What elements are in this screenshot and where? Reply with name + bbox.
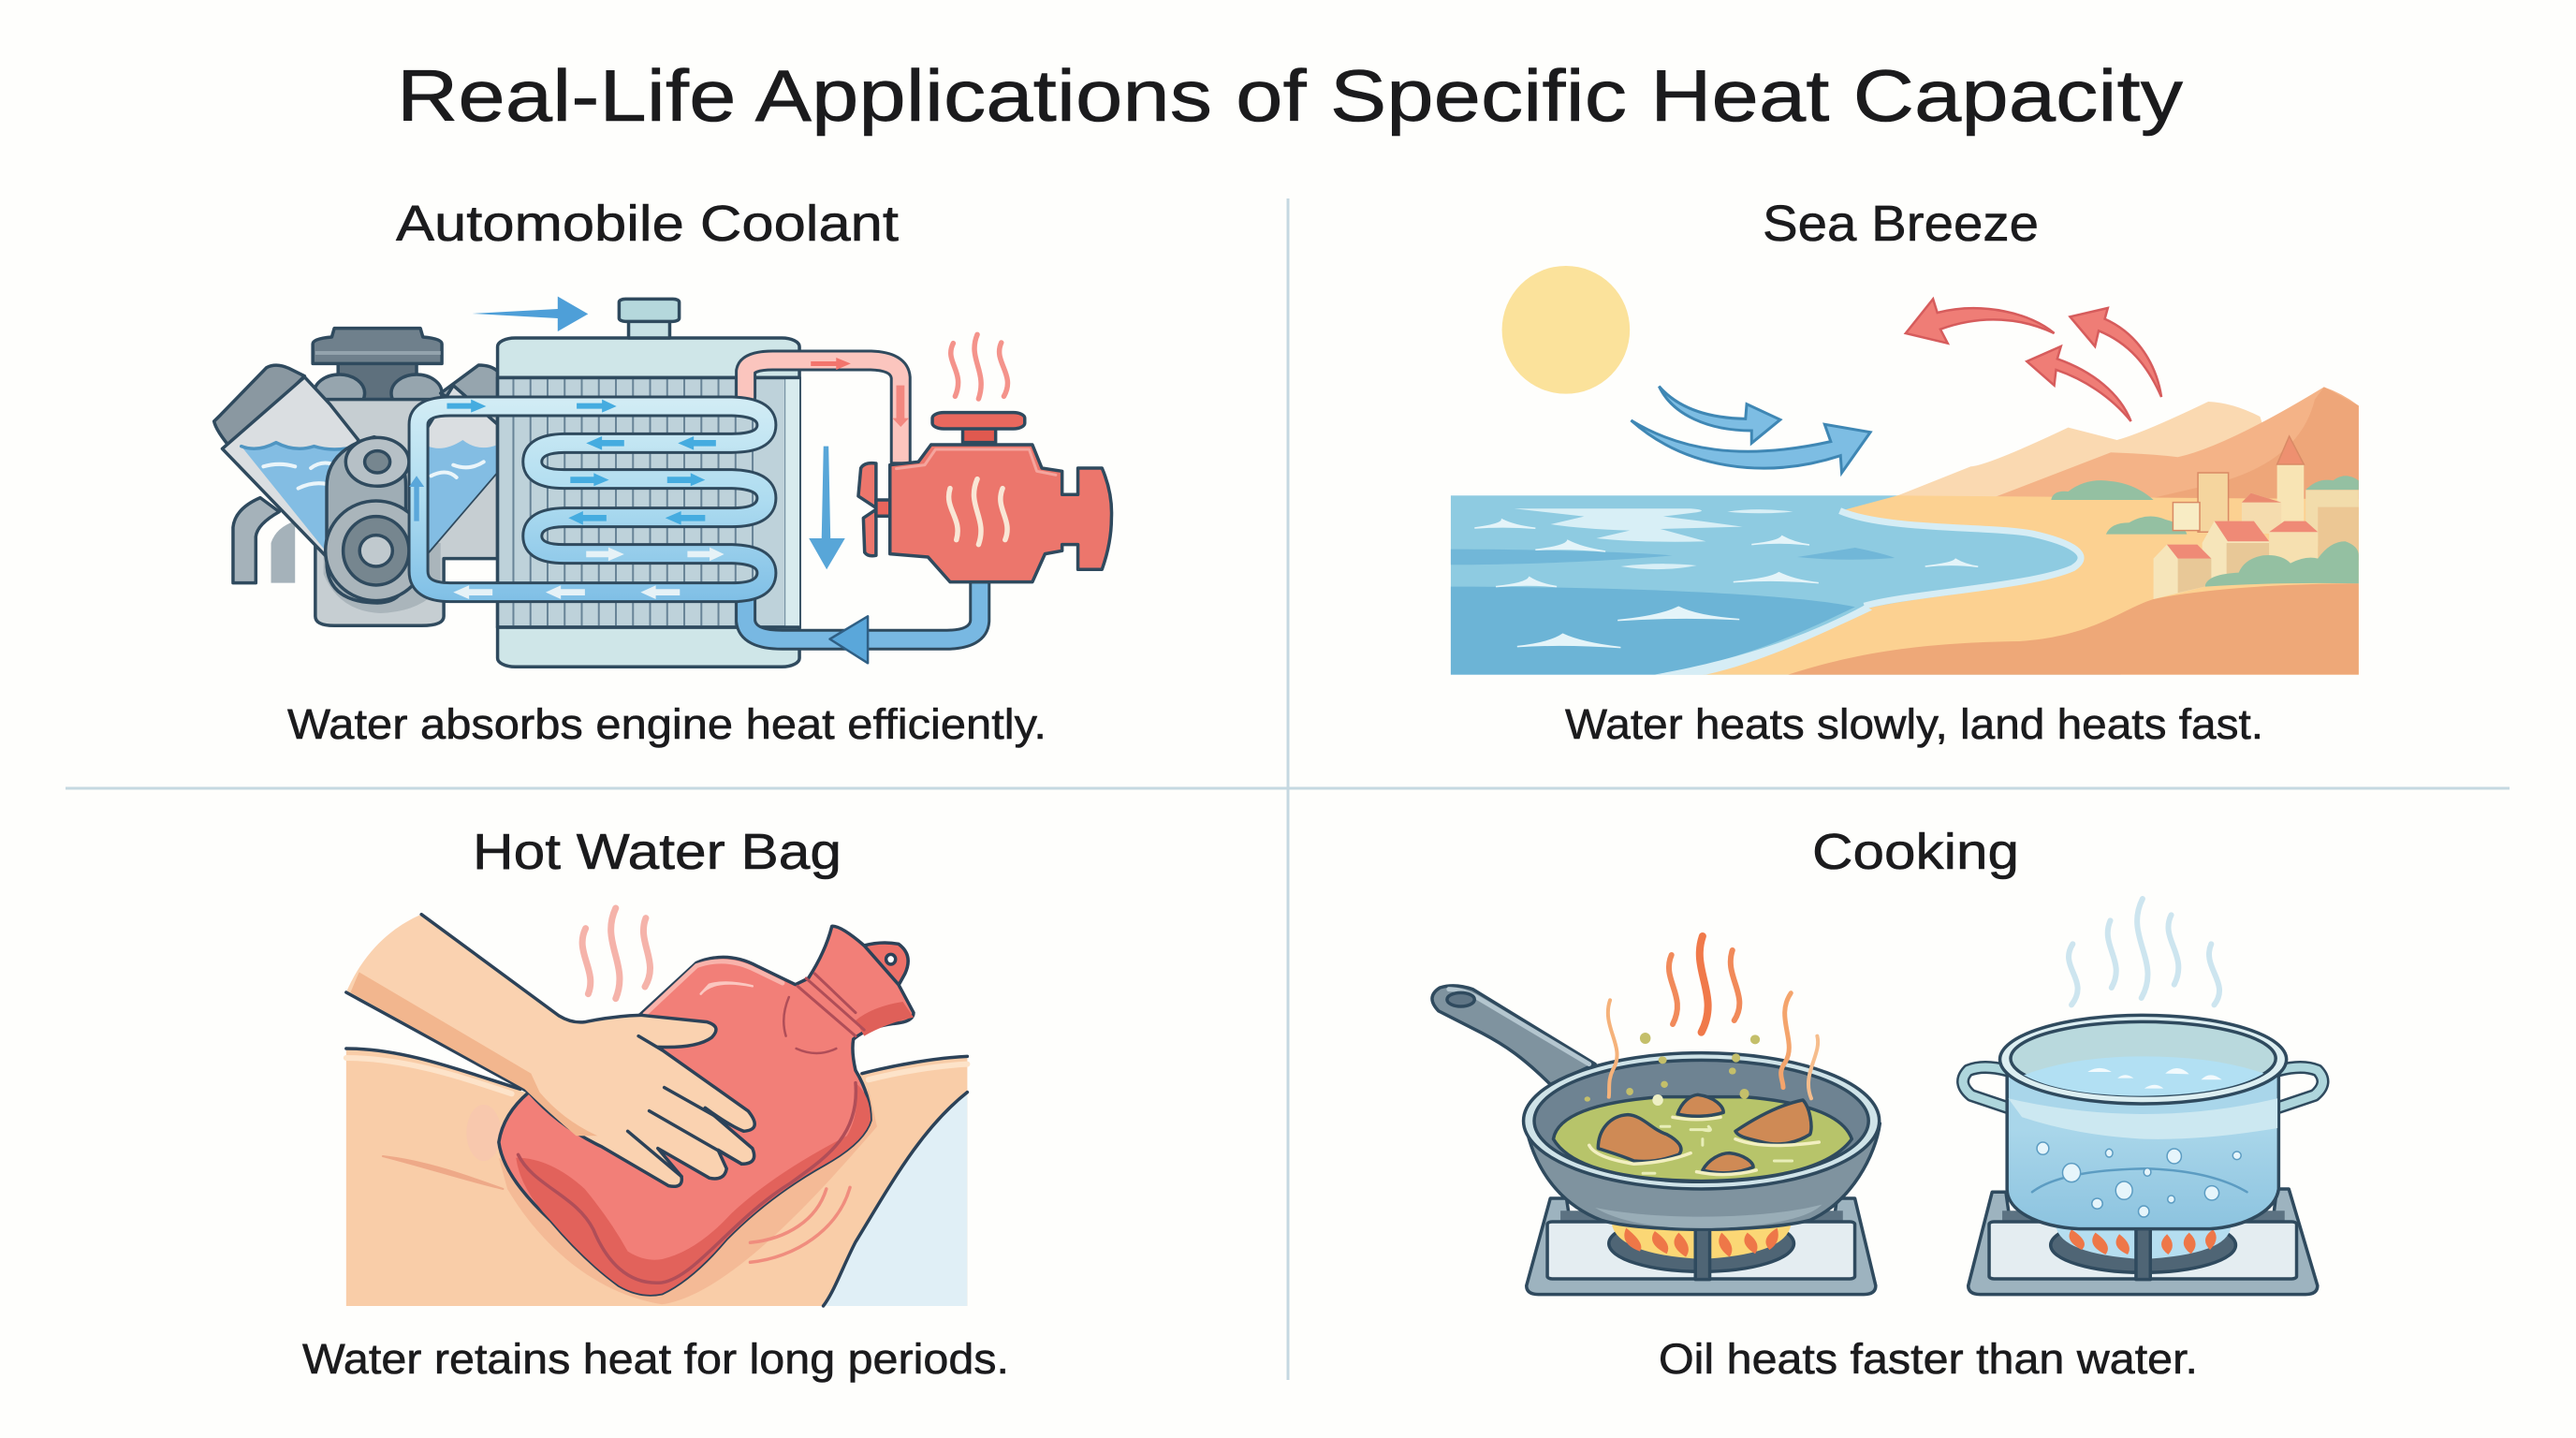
- arrow: down air flow: [809, 447, 845, 569]
- icon: pot of water: [1963, 1015, 2323, 1229]
- mountains: [1897, 387, 2359, 515]
- heat lines under bag: [750, 1187, 850, 1262]
- steam: [582, 908, 650, 999]
- icon: stove under pan: [1527, 1198, 1876, 1295]
- illustration: hand on hot water bottle: [346, 908, 967, 1306]
- town: [2051, 436, 2359, 599]
- illustration: engine and radiator: [214, 297, 1112, 667]
- caption: cooking: Oil heats faster than water.: [1659, 1335, 2198, 1383]
- icon: hand and arm: [346, 915, 754, 1186]
- caption: sea breeze: Water heats slowly, land heats fast.: [1565, 700, 2263, 748]
- flames and heat above pan: [1608, 936, 1818, 1098]
- pipe: hot coolant: [746, 360, 900, 462]
- blanket: [824, 1093, 967, 1306]
- icon: hot water bottle: [499, 926, 914, 1295]
- heading: automobile coolant: Automobile Coolant: [396, 196, 899, 252]
- beach and coastline: [1654, 495, 2359, 675]
- icon: sun: [1502, 266, 1630, 394]
- title: Real-Life Applications of Specific Heat Capacity: [397, 54, 2183, 137]
- icon: steam from engine: [951, 334, 1007, 399]
- icon: red hot engine: [858, 413, 1112, 582]
- arrows: warm rising air: [1906, 299, 2161, 421]
- heading: hot water bag: Hot Water Bag: [473, 824, 842, 880]
- sea: [1451, 495, 2120, 675]
- body skin: [346, 1049, 967, 1306]
- illustration: pan and pot on stoves: [1432, 899, 2323, 1295]
- arrows: coolant flow direction: [409, 358, 909, 663]
- panel: sea breeze: [1451, 196, 2359, 748]
- panel: hot water bag: [302, 824, 1009, 1383]
- arrow: top air flow: [473, 297, 588, 331]
- panel: cooking: [1432, 824, 2323, 1383]
- icon: fried food pieces: [1589, 1094, 1819, 1175]
- panel: automobile coolant: [214, 196, 1112, 748]
- divider: horizontal: [66, 786, 2510, 790]
- heading: cooking: Cooking: [1812, 824, 2019, 880]
- caption: automobile coolant: Water absorbs engine heat efficiently.: [287, 700, 1046, 748]
- icon: grey engine: [214, 329, 498, 625]
- water bubbles: [2037, 1068, 2241, 1217]
- arrows: cool sea breeze: [1631, 387, 1870, 473]
- icon: stove under pot: [1969, 1189, 2318, 1295]
- oil splatter: [1585, 1033, 1760, 1106]
- caption: hot water bag: Water retains heat for long periods.: [302, 1335, 1009, 1383]
- pipe: cool return: [746, 583, 980, 639]
- pipe: serpentine coolant tube: [418, 406, 767, 593]
- icon: frying pan: [1432, 986, 1880, 1229]
- heading: sea breeze: Sea Breeze: [1763, 196, 2039, 252]
- icon: radiator: [498, 299, 799, 667]
- divider: vertical: [1286, 198, 1290, 1380]
- illustration: coast scene: [1451, 266, 2359, 675]
- steam from pot: [2069, 899, 2219, 1005]
